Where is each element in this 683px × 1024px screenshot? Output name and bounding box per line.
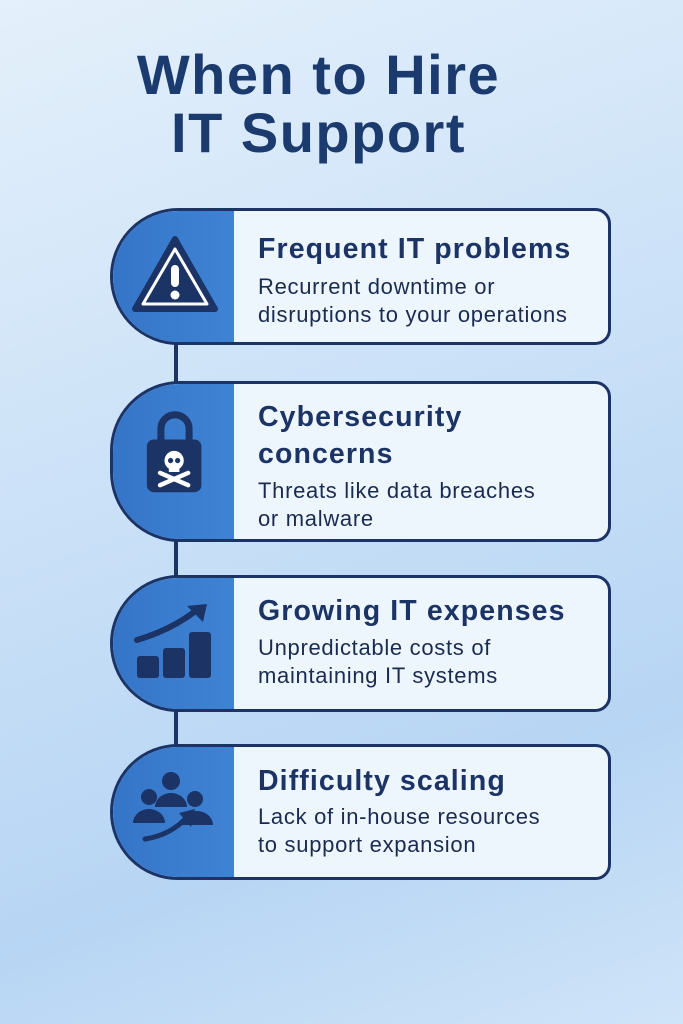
card: frequent IT problems xyxy=(110,208,611,345)
text block: Frequent IT problems xyxy=(258,233,571,265)
title: IT Support xyxy=(171,101,466,164)
text block: Cybersecurity xyxy=(258,401,462,433)
text block: maintaining IT systems xyxy=(258,663,498,688)
text block xyxy=(258,233,571,327)
text block xyxy=(258,765,540,857)
icon: people with arrow xyxy=(133,772,213,842)
connector line xyxy=(174,340,178,750)
text block: Growing IT expenses xyxy=(258,595,566,627)
text block: or malware xyxy=(258,506,374,531)
text block: disruptions to your operations xyxy=(258,302,568,327)
text block: Difficulty scaling xyxy=(258,765,506,797)
text block xyxy=(258,401,535,531)
icon: lock with skull xyxy=(146,411,202,492)
card: growing expenses xyxy=(110,575,611,712)
text block: to support expansion xyxy=(258,832,476,857)
text block: Threats like data breaches xyxy=(258,478,535,503)
icon: bar chart arrow xyxy=(134,604,211,678)
title: When to Hire xyxy=(137,43,500,106)
card: difficulty scaling xyxy=(110,744,611,880)
text block: Lack of in-house resources xyxy=(258,804,540,829)
card: cybersecurity xyxy=(110,381,611,542)
text block: concerns xyxy=(258,438,394,470)
title xyxy=(137,43,500,164)
text block xyxy=(258,595,566,688)
text block: Unpredictable costs of xyxy=(258,635,491,660)
text block: Recurrent downtime or xyxy=(258,274,495,299)
icon: warning triangle xyxy=(132,236,218,312)
